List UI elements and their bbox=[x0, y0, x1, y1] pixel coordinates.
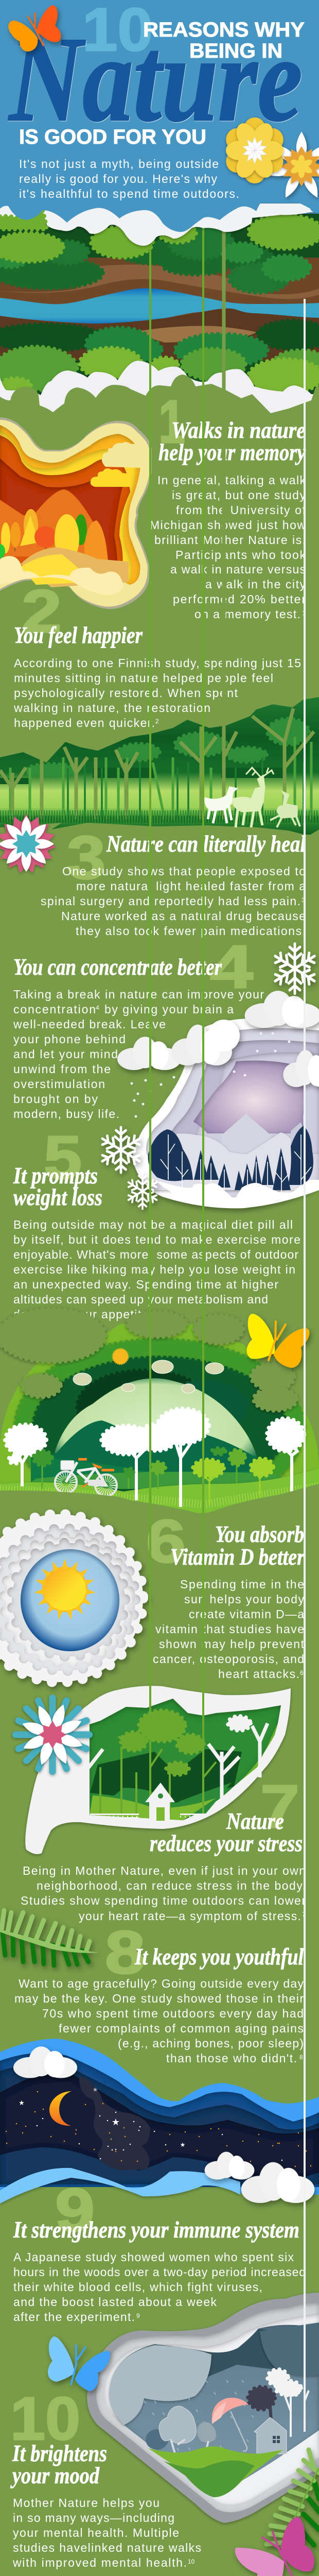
section 4: body text bbox=[13, 988, 264, 1121]
section 2: body text: 2 bbox=[155, 718, 159, 725]
section 10: body text: with improved mental health. bbox=[12, 2556, 187, 2569]
scene: sun through clouds bbox=[0, 1514, 143, 1682]
icon: house and fence bbox=[90, 1783, 203, 1821]
clouds bbox=[91, 442, 141, 487]
rain bbox=[144, 2380, 273, 2458]
icon: orange butterfly bbox=[8, 5, 61, 52]
section 5: body text: enjoyable. What's more, some aspects of outdoor bbox=[13, 1248, 298, 1261]
icon: right fern bbox=[267, 2450, 319, 2548]
section 7: body text: Studies show spending time outdoors can lower bbox=[21, 1894, 306, 1907]
section 3: body text: they also took fewer pain medications. bbox=[76, 924, 306, 938]
header: blue sky bbox=[0, 0, 319, 232]
section 8: body text: Want to age gracefully? Going outside every day bbox=[19, 1977, 304, 1990]
section 1: heading bbox=[158, 417, 306, 465]
section 8: body text: 8 bbox=[299, 2054, 303, 2061]
green trees bbox=[33, 1448, 273, 1504]
icon: fern bbox=[0, 1910, 99, 1965]
section 4: heading: You can concentrate better bbox=[13, 954, 222, 980]
section 1: body text: is great, but one study bbox=[172, 488, 306, 502]
section 10: heading: your mood bbox=[10, 2463, 100, 2488]
trees bbox=[148, 1126, 313, 1190]
foreground hills bbox=[0, 547, 129, 595]
section 1: body text: on a memory test. bbox=[194, 607, 300, 621]
section 2: heading: You feel happier bbox=[14, 622, 143, 648]
section 10: heading bbox=[10, 2441, 107, 2488]
section 6: body text: Spending time in the bbox=[180, 1578, 304, 1591]
section 3: body text bbox=[41, 865, 306, 938]
section 1: body text: from the University of bbox=[176, 503, 306, 517]
section 6: body text: vitamin that studies have bbox=[155, 1622, 304, 1636]
stars bbox=[6, 2092, 311, 2166]
section 8: number: 8 bbox=[105, 1919, 145, 1987]
title: reasons why: BEING IN bbox=[189, 40, 282, 62]
scene: night sky bbox=[0, 2039, 319, 2204]
title: reasons why: REASONS WHY bbox=[143, 19, 305, 41]
section 6: heading bbox=[170, 1521, 305, 1570]
section 5: heading: weight loss bbox=[13, 1184, 102, 1210]
section 1: body text: a walk in nature versus bbox=[170, 563, 306, 576]
section 9: body text: after the experiment. bbox=[13, 2310, 135, 2324]
icon: snowflakes bbox=[99, 944, 317, 1209]
section 7: body text: neighborhood, can reduce stress in the body. bbox=[37, 1879, 306, 1892]
section 5: body text: altitudes can speed up your metabolism and bbox=[13, 1293, 268, 1306]
section 7: body text: Being in Mother Nature, even if just in your own bbox=[23, 1864, 306, 1877]
section 10: body text: studies havelinked nature walks bbox=[13, 2541, 201, 2554]
section 1: body text: In general, talking a walk bbox=[157, 473, 306, 487]
left tree bbox=[0, 210, 47, 229]
scene: forest and bicycle bbox=[0, 1309, 319, 1525]
icon: yellow butterfly bbox=[247, 1314, 309, 1368]
icon: sun bbox=[34, 1558, 96, 1620]
section 9: number: 9 bbox=[55, 2176, 95, 2244]
section 4: body text: overstimulation bbox=[13, 1077, 105, 1091]
section 10: number: 10 bbox=[10, 2385, 80, 2453]
section 10: body text: in so many ways—including bbox=[13, 2511, 174, 2524]
scene: winter landscape bbox=[117, 991, 319, 1208]
section 7: heading bbox=[150, 1808, 303, 1856]
section 1: body text: brilliant Mother Nature is. bbox=[154, 533, 306, 547]
section 2: body text: According to one Finnish study, spending just 15 bbox=[14, 656, 301, 670]
section 10: body text: Mother Nature helps you bbox=[13, 2496, 160, 2510]
scene: leaf with forest and house bbox=[25, 144, 291, 1854]
icon: blue butterfly bbox=[48, 2336, 110, 2391]
section 6: number: 6 bbox=[146, 1507, 186, 1575]
scene: night sky: ★ bbox=[180, 2141, 185, 2148]
section 6: body text: shown may help prevent bbox=[159, 1637, 305, 1651]
section 9: body text: and the boost lasted about a week bbox=[13, 2295, 217, 2309]
section 1: autumn scene bbox=[0, 417, 152, 609]
section 6: body text: heart attacks. bbox=[218, 1667, 299, 1681]
white trees bbox=[14, 1440, 298, 1507]
section 4: body text: concentration bbox=[13, 1003, 96, 1016]
section 3: body text: One study shows that people exposed to bbox=[62, 865, 306, 878]
section 4: body text: unwind from the bbox=[13, 1062, 111, 1076]
intro text: It's not just a myth, being outside bbox=[19, 157, 219, 171]
section 7: body text bbox=[21, 1864, 306, 1923]
section 7: heading: Nature bbox=[226, 1808, 284, 1834]
intro text: it's healthful to spend time outdoors. bbox=[19, 187, 239, 200]
section 2: body text: happened even quicker. bbox=[14, 716, 155, 730]
section 1: body text: performed 20% better bbox=[173, 592, 306, 606]
section 5: heading bbox=[13, 1163, 102, 1210]
section 4: body text: modern, busy life. bbox=[13, 1107, 119, 1121]
section 4: body text: and let your mind bbox=[13, 1047, 118, 1061]
section 4: body text: your phone behind bbox=[13, 1032, 126, 1046]
section 1: body text: 1 bbox=[302, 609, 306, 617]
section 9: body text: their white blood cells, which fight viruses, bbox=[13, 2280, 262, 2294]
section 5: body text: by itself, but it does tend to make exercise more bbox=[13, 1233, 300, 1246]
section 8: body text: than those who didn't. bbox=[166, 2052, 297, 2065]
sun and clouds bbox=[73, 1349, 224, 1393]
title: reasons why bbox=[143, 19, 305, 62]
scene: forest with deer bbox=[0, 216, 319, 837]
clouds and snow bbox=[117, 991, 319, 1087]
icon: white and orange flower bbox=[265, 132, 319, 200]
section 5: body text: decrease your appetite. bbox=[13, 1308, 152, 1321]
icon: moon bbox=[49, 2091, 72, 2126]
section 2: body text bbox=[13, 656, 301, 730]
section 6: body text: sun helps your body bbox=[184, 1592, 305, 1606]
section 2: body text: walking in nature, the restoration bbox=[13, 701, 210, 715]
section 5: body text: Being outside may not be a magical diet pill all bbox=[13, 1218, 293, 1231]
section 1: body text: Michigan showed just how bbox=[150, 518, 306, 532]
section 8: body text: (e.g., aching bones, poor sleep) bbox=[118, 2037, 304, 2050]
scene: forest and river bbox=[0, 214, 319, 422]
section 10: body text: your mental health. Multiple bbox=[13, 2526, 179, 2539]
section 9: body text bbox=[13, 2250, 306, 2324]
icon: yellow flower top bbox=[222, 117, 287, 183]
section 4: body text: Taking a break in nature can improve your bbox=[13, 988, 264, 1001]
section 10: body text bbox=[12, 2496, 201, 2569]
section 1: body text: Participants who took bbox=[175, 548, 306, 562]
section 5: number: 5 bbox=[44, 1124, 82, 1192]
section 3: number: 3 bbox=[67, 824, 105, 892]
section 7: body text: your heart rate—a symptom of stress. bbox=[79, 1909, 301, 1923]
section 5: body text bbox=[13, 1218, 300, 1321]
section 3: body text: more natural light healed faster from a bbox=[76, 879, 306, 893]
section 1: heading: Walks in nature bbox=[171, 417, 306, 443]
icon: pink butterfly bbox=[235, 2517, 314, 2576]
section 8: body text: may be the key. One study showed those in their bbox=[14, 1992, 304, 2005]
icon: teal flower bbox=[12, 1694, 93, 1775]
section 10: heading: It brightens bbox=[12, 2441, 107, 2466]
trees and house bbox=[146, 299, 309, 2454]
section 3: body text: spinal surgery and reportedly had less pain. bbox=[41, 894, 300, 908]
section 9: body text: A Japanese study showed women who spent six bbox=[13, 2250, 294, 2264]
section 10: body text: 10 bbox=[188, 2558, 195, 2565]
section 6: body text: 6 bbox=[300, 1669, 304, 1676]
scene: rainy heart bbox=[87, 299, 319, 2523]
section 6: body text: cancer, osteoporosis, and bbox=[153, 1652, 304, 1666]
icon: umbrella bbox=[212, 2398, 249, 2451]
section 3: body text: Nature worked as a natural drug because bbox=[61, 909, 306, 923]
section 4: number: 4 bbox=[210, 933, 253, 1001]
section 5: body text: exercise like hiking may help you lose weight in bbox=[13, 1263, 295, 1276]
section 4: body text: brought on by bbox=[13, 1092, 98, 1106]
section 9: body text: hours in the woods over a two-day period increased bbox=[13, 2265, 306, 2279]
icon: bicycle bbox=[55, 1458, 117, 1496]
scene: night sky: ★ bbox=[93, 2086, 98, 2093]
intro text bbox=[19, 157, 239, 200]
section 4: body text: well-needed break. Leave bbox=[13, 1018, 166, 1031]
trees bbox=[0, 509, 109, 580]
section 5: heading: It prompts bbox=[13, 1163, 98, 1189]
section 2: number: 2 bbox=[22, 578, 62, 646]
canopy foreground bbox=[0, 1309, 297, 1411]
section 3: body text: 3 bbox=[302, 896, 305, 904]
section 6: body text bbox=[153, 1578, 305, 1681]
section 2: body text: minutes sitting in nature helped people feel bbox=[14, 671, 273, 685]
section 1: number: 1 bbox=[158, 388, 185, 456]
white cloud band bbox=[0, 361, 319, 422]
section 8: body text: 70s who spent time outdoors every day had bbox=[42, 2007, 304, 2020]
section 9: body text: 9 bbox=[136, 2312, 140, 2319]
section 5: body text: an unexpected way. Spending time at higher bbox=[13, 1278, 278, 1291]
section 8: body text: fewer complaints of common aging pains bbox=[59, 2022, 304, 2035]
section 6: body text: create vitamin D—a bbox=[189, 1607, 304, 1621]
section 7: number: 7 bbox=[260, 1773, 299, 1841]
section 6: heading: You absorb bbox=[215, 1521, 304, 1547]
section 1: body text: a walk in the city bbox=[205, 578, 306, 591]
icon: deer bbox=[205, 768, 300, 827]
title: is good for you: IS GOOD FOR YOU bbox=[19, 126, 206, 148]
section 2: body text: psychologically restored. When spent bbox=[14, 686, 238, 700]
section 1: body text bbox=[150, 473, 306, 621]
scene: night sky: ★ bbox=[112, 2117, 120, 2128]
section 7: body text: 7 bbox=[302, 1911, 306, 1918]
section 8: body text bbox=[14, 1977, 304, 2065]
section 5: body text: 5 bbox=[153, 1309, 156, 1316]
intro text: really is good for you. Here's why bbox=[19, 172, 217, 185]
clouds bbox=[13, 2046, 314, 2203]
section 4: body text: 4 bbox=[96, 1004, 99, 1011]
scene: night sky: ★ bbox=[19, 2099, 25, 2107]
section 4: body text: by giving your brain a bbox=[104, 1003, 234, 1016]
header: white clouds bbox=[0, 204, 319, 246]
icon: pink flower bbox=[0, 814, 57, 874]
hills bbox=[148, 2446, 283, 2497]
